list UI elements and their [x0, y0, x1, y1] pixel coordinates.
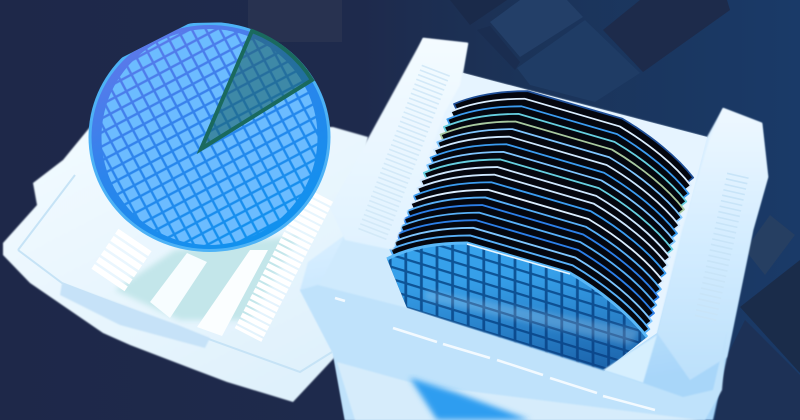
right wafer rack — [657, 108, 768, 380]
rim highlights — [335, 298, 655, 410]
front wafer top edge — [387, 243, 647, 337]
highlighted slice — [201, 31, 312, 149]
right rack ribs — [705, 175, 738, 320]
lid outer wall — [60, 283, 210, 348]
lid inner rim — [18, 175, 332, 372]
box interior — [375, 73, 707, 370]
blue shadow in box — [410, 378, 530, 420]
box body — [300, 38, 768, 420]
left wafer rack — [330, 38, 468, 250]
front wafer with die grid — [387, 244, 647, 372]
lid comb ribs — [108, 195, 320, 336]
wafer face — [92, 25, 328, 249]
open lid of carrier — [3, 127, 368, 402]
lid teal bands — [115, 235, 300, 320]
wafer carrier box — [300, 38, 768, 420]
wafer stack — [390, 91, 693, 364]
wafer reflection band — [425, 290, 640, 345]
box front rim — [300, 285, 727, 420]
background chip tiles — [248, 0, 800, 420]
wafer rim — [88, 22, 330, 252]
left rack ribs — [372, 70, 436, 235]
right interior corner — [603, 335, 657, 383]
die grid — [102, 29, 318, 245]
box front face — [337, 362, 700, 420]
wafer diagram — [88, 22, 330, 252]
left interior corner — [318, 235, 407, 308]
front wafer highlight — [467, 244, 570, 274]
